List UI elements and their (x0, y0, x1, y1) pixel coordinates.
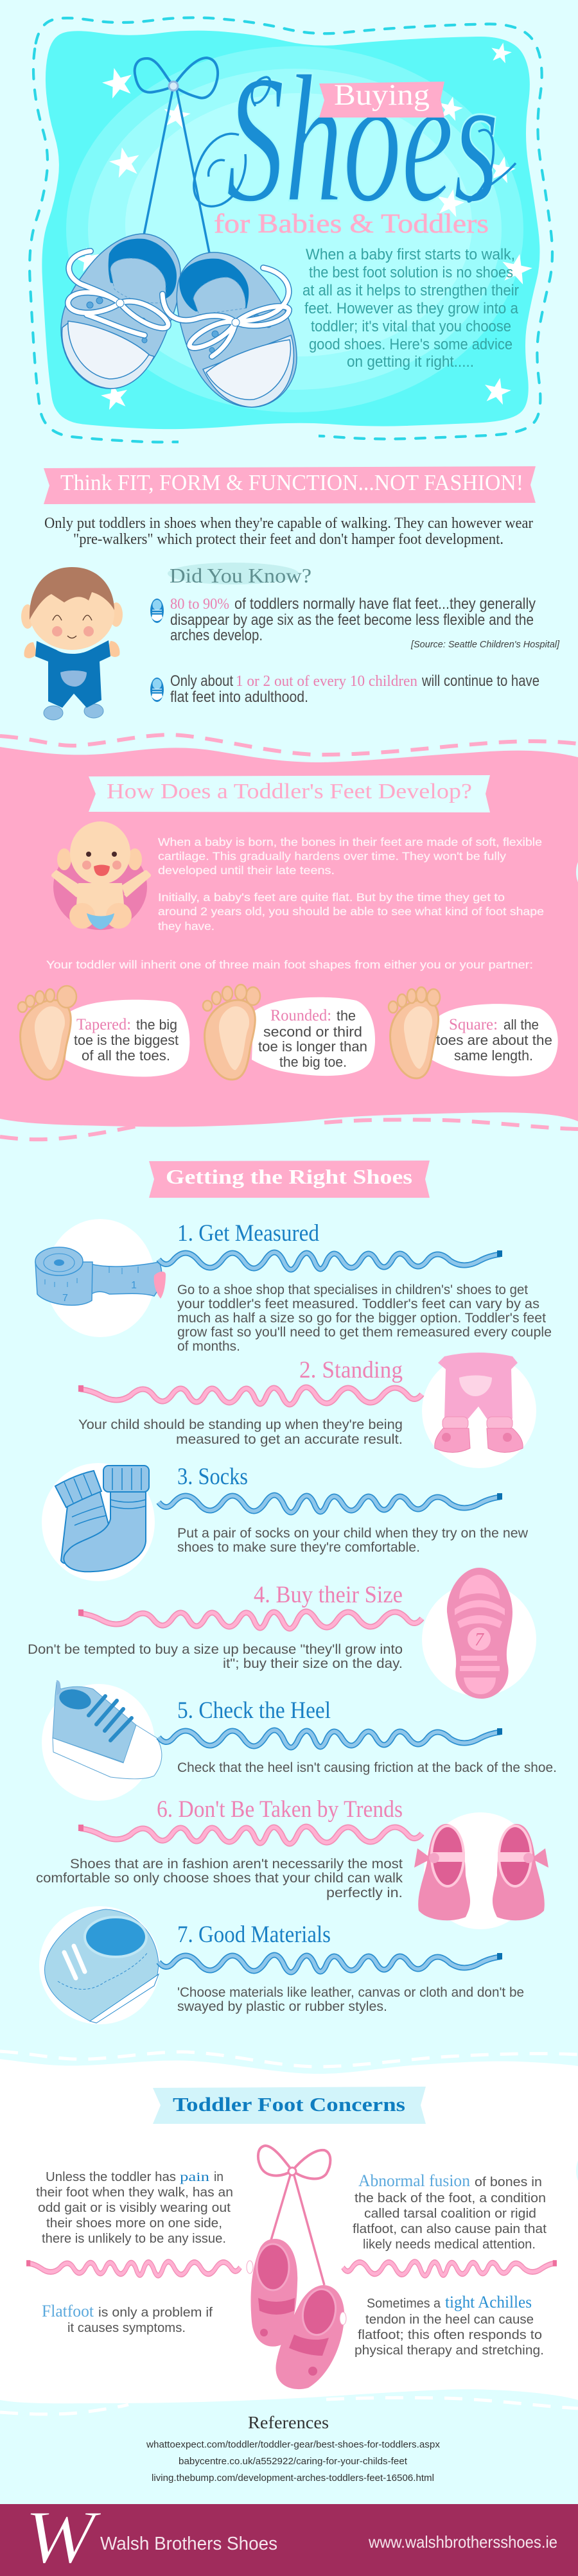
panel: hero header (30, 17, 552, 452)
panel: getting the right shoes (28, 1161, 557, 2024)
foot shape: square: all the (504, 1017, 539, 1033)
fact: adulthood: flat feet into adulthood. (170, 688, 308, 706)
references: babycentre.co.uk/a552922/caring-for-your-childs-feet (179, 2456, 408, 2467)
fact: adulthood: Only about (170, 672, 233, 690)
panel: did you know (150, 563, 560, 706)
subtitle: for Babies & Toddlers (214, 209, 489, 239)
intro paragraph (44, 515, 533, 548)
step 2: standing (78, 1353, 536, 1468)
icon: bullet shoe (150, 678, 164, 702)
intro paragraph: Only put toddlers in shoes when they're capable of walking. They can however wear (44, 515, 533, 532)
icon: baby (53, 821, 149, 930)
hero intro text: When a baby first starts to walk, (306, 246, 515, 263)
concern: pain: odd gait or is visibly wearing out (38, 2201, 231, 2215)
concern: flatfoot: Flatfoot (42, 2302, 94, 2320)
step text (177, 1985, 524, 2014)
concern: pain: Unless the toddler has (46, 2170, 176, 2184)
step 6: trends (36, 1796, 548, 1929)
step text: Your child should be standing up when they're being (78, 1417, 403, 1432)
pink stitches (0, 735, 578, 1139)
step text (28, 1642, 403, 1671)
foot shape: tapered: the big (136, 1017, 177, 1033)
concern: tight achilles: tight Achilles (445, 2293, 532, 2311)
icon: blue shoe top view (39, 1906, 160, 2024)
concern: pain: pain (180, 2170, 209, 2184)
concern: abnormal fusion: likely needs medical attention. (363, 2238, 536, 2252)
fact: flat feet: of toddlers normally have flat feet...they generally (234, 595, 536, 613)
panel: toddler foot concerns (0, 2051, 578, 2414)
icon: pink romper (422, 1353, 536, 1468)
step text: measured to get an accurate result. (176, 1432, 403, 1447)
step text: Go to a shoe shop that specialises in children's' shoes to get (177, 1283, 528, 1297)
wavy lace (159, 1728, 502, 1748)
concern: flatfoot: is only a problem if (98, 2306, 213, 2320)
step text: comfortable so only choose shoes that your child can walk (36, 1871, 403, 1886)
step text: shoes to make sure they're comfortable. (177, 1540, 420, 1555)
concern: abnormal fusion: the back of the foot, a condition (355, 2191, 546, 2205)
white wavy background (0, 2059, 578, 2403)
wavy lace left (26, 2260, 240, 2275)
fact: adulthood: 1 or 2 out of every 10 children (236, 673, 417, 690)
brand name: Walsh Brothers Shoes (100, 2534, 277, 2554)
development text: Initially, a baby's feet are quite flat. But by the time they get to (158, 891, 505, 904)
fact: flat feet: disappear by age six as the feet become less flexible and the (170, 611, 534, 629)
step text: Check that the heel isn't causing friction at the back of the shoe. (177, 1760, 557, 1775)
development text: around 2 years old, you should be able to see what kind of foot shape (158, 905, 544, 918)
step 7: good materials (39, 1906, 524, 2024)
fact: adulthood: will continue to have (421, 672, 539, 690)
step text (177, 1283, 552, 1354)
references: whattoexpect.com/toddler/toddler-gear/best-shoes-for-toddlers.aspx (146, 2439, 441, 2450)
icon: hanging bow and strings (135, 58, 218, 253)
wavy lace (159, 1250, 502, 1270)
source note: [Source: Seattle Children's Hospital] (410, 639, 560, 650)
wavy lace (78, 1609, 422, 1629)
development text (158, 836, 544, 933)
foot shape: square: Square: (449, 1016, 498, 1033)
references: living.thebump.com/development-arches-toddlers-feet-16506.html (152, 2473, 434, 2484)
foot shape: rounded: second or third (263, 1024, 362, 1040)
hero intro text: feet. However as they grow into a (304, 300, 519, 317)
step title: 5. Check the Heel (177, 1697, 331, 1724)
hero intro text: at all as it helps to strengthen their (302, 282, 519, 299)
foot shape: tapered: of all the toes. (82, 1047, 170, 1064)
wavy lace (78, 1385, 422, 1405)
icon: tape measure: 7 (62, 1293, 68, 1304)
hero intro text: on getting it right..... (347, 353, 474, 371)
step text: perfectly in. (326, 1886, 403, 1900)
concern: tight achilles: tendon in the heel can cause (365, 2313, 534, 2327)
step text (177, 1526, 529, 1555)
foot shape: square: toes are about the (436, 1032, 552, 1048)
hero intro text: toddler; it's vital that you choose (311, 318, 511, 335)
development text: developed until their late teens. (158, 864, 335, 877)
step text: grow fast so you'll need to get them remeasured every couple (177, 1325, 552, 1340)
icon: blue baby shoes (61, 234, 297, 407)
foot shape: rounded: the (337, 1008, 356, 1024)
icon: socks (42, 1463, 155, 1581)
concern: abnormal fusion: flatfoot, can also cause pain that (353, 2222, 547, 2236)
left shoe (61, 234, 180, 389)
step text (36, 1857, 403, 1900)
icon: stars (74, 40, 534, 411)
step text: swayed by plastic or rubber styles. (177, 1999, 387, 2014)
fact: flat feet: arches develop. (170, 627, 263, 644)
heading banner: fit form function: Think FIT, FORM & FUNCTION...NOT FASHION! (60, 470, 523, 495)
step title: 7. Good Materials (177, 1922, 331, 1948)
stitch gap (179, 433, 319, 452)
step text: Shoes that are in fashion aren't necessarily the most (70, 1857, 403, 1871)
concern: pain (36, 2170, 233, 2246)
icon: toddler in blue romper (21, 567, 123, 720)
section heading banner: How Does a Toddler's Feet Develop? (107, 780, 472, 803)
concern: pain: in (214, 2170, 223, 2184)
foot shape: rounded: the big toe. (279, 1054, 347, 1070)
inherit text: Your toddler will inherit one of three main foot shapes from either you or your partner: (46, 958, 533, 971)
concern: tight achilles: flatfoot; this often responds to (358, 2328, 542, 2342)
concern: abnormal fusion: Abnormal fusion (358, 2171, 470, 2190)
step 3: socks (42, 1463, 529, 1581)
section heading banner: Getting the Right Shoes (166, 1165, 412, 1188)
hero intro text: good shoes. Here's some advice (309, 336, 512, 353)
right shoe (177, 252, 297, 407)
wavy lace (159, 1493, 502, 1512)
foot shape: tapered: Tapered: (76, 1016, 131, 1033)
fact: flat feet (170, 595, 536, 644)
foot shape: square: same length. (454, 1047, 533, 1064)
concern: flatfoot: it causes symptoms. (67, 2321, 186, 2335)
did you know heading: Did You Know? (170, 564, 311, 587)
icon: pink ballet shoes (414, 1812, 548, 1929)
foot shape: rounded: toe is longer than (258, 1038, 367, 1055)
banner: Buying (319, 78, 444, 118)
section heading banner (89, 775, 490, 812)
step text: of months. (177, 1339, 240, 1354)
wavy lace (78, 1825, 422, 1844)
icon: shoe sole size 7: 7 (475, 1630, 484, 1650)
step text: much as half a size so go for the bigger option. Toddler's feet (177, 1311, 546, 1326)
foot shape: rounded (203, 985, 375, 1080)
hero blob background (42, 31, 539, 429)
references: References (248, 2413, 329, 2432)
icon: tape measure (35, 1219, 166, 1337)
section heading banner (153, 2087, 426, 2124)
icon: hanging pink shoes (247, 2146, 346, 2389)
step 5: check the heel (42, 1680, 557, 1801)
step text: Put a pair of socks on your child when they try on the new (177, 1526, 529, 1541)
wavy lace (159, 1953, 502, 1972)
wavy lace right (343, 2260, 557, 2275)
heading banner: fit form function (44, 466, 536, 504)
step text: 'Choose materials like leather, canvas or cloth and don't be (177, 1985, 524, 2000)
concern: tight achilles: Sometimes a (367, 2297, 441, 2311)
development text: cartilage. This gradually hardens over time. They won't be fully (158, 850, 506, 863)
shoe eyelets (87, 297, 272, 353)
fact: flat feet: 80 to 90% (170, 596, 229, 613)
step title: 1. Get Measured (177, 1220, 319, 1247)
shoe laces (68, 251, 289, 356)
banner: Buying: Buying (334, 78, 430, 112)
concern: pain: their shoes more on one side, (46, 2216, 222, 2230)
step 1: get measured (35, 1219, 552, 1354)
footer (0, 2495, 578, 2576)
concern: pain: their foot when they walk, has an (36, 2186, 233, 2200)
hero intro text (302, 246, 519, 371)
step text: Don't be tempted to buy a size up because "they'll grow into (28, 1642, 403, 1657)
step text (78, 1417, 403, 1447)
hero stitched border (30, 17, 552, 442)
concern: abnormal fusion (353, 2171, 547, 2252)
foot shape: square (389, 987, 558, 1078)
fact: adulthood (170, 672, 539, 706)
section heading banner (149, 1161, 430, 1198)
edge notch (576, 2158, 578, 2184)
development text: When a baby is born, the bones in their feet are made of soft, flexible (158, 836, 542, 848)
step text: your toddler's feet measured. Toddler's feet can vary by as (177, 1297, 539, 1311)
icon: bullet shoe (150, 599, 164, 623)
step title: 3. Socks (177, 1464, 248, 1490)
step title: 2. Standing (299, 1357, 403, 1383)
foot shape: tapered: toe is the biggest (74, 1032, 179, 1048)
hero inner glow rings (66, 46, 523, 412)
concern: pain: there is unlikely to be any issue. (42, 2232, 226, 2246)
concern: abnormal fusion: called tarsal coalition or rigid (364, 2207, 536, 2221)
hero intro text: the best foot solution is no shoes (309, 264, 513, 281)
icon: tape measure: 1 (131, 1280, 137, 1291)
concern: tight achilles: physical therapy and stretching. (355, 2344, 544, 2358)
website: www.walshbrothersshoes.ie (368, 2532, 557, 2552)
references (146, 2413, 441, 2484)
white stitches (0, 2051, 578, 2414)
icon: blue sneaker (42, 1680, 162, 1801)
step title: 6. Don't Be Taken by Trends (157, 1796, 403, 1823)
step text: it"; buy their size on the day. (223, 1656, 403, 1671)
foot shape: rounded: Rounded: (270, 1007, 331, 1024)
pink wavy background (0, 747, 578, 1127)
development text: they have. (158, 920, 215, 933)
concern: tight achilles (355, 2293, 544, 2358)
icon: shoe sole size 7 (422, 1568, 536, 1699)
foot shape: tapered (18, 986, 189, 1080)
step 4: buy their size (28, 1568, 536, 1699)
concern: abnormal fusion: of bones in (475, 2175, 542, 2189)
step title: 4. Buy their Size (254, 1582, 403, 1608)
concern: flatfoot (42, 2302, 213, 2335)
intro paragraph: "pre-walkers" which protect their feet and don't hamper foot development. (73, 531, 504, 548)
panel: how feet develop (0, 735, 578, 1139)
section heading banner: Toddler Foot Concerns (173, 2093, 405, 2116)
edge notch (576, 859, 578, 885)
